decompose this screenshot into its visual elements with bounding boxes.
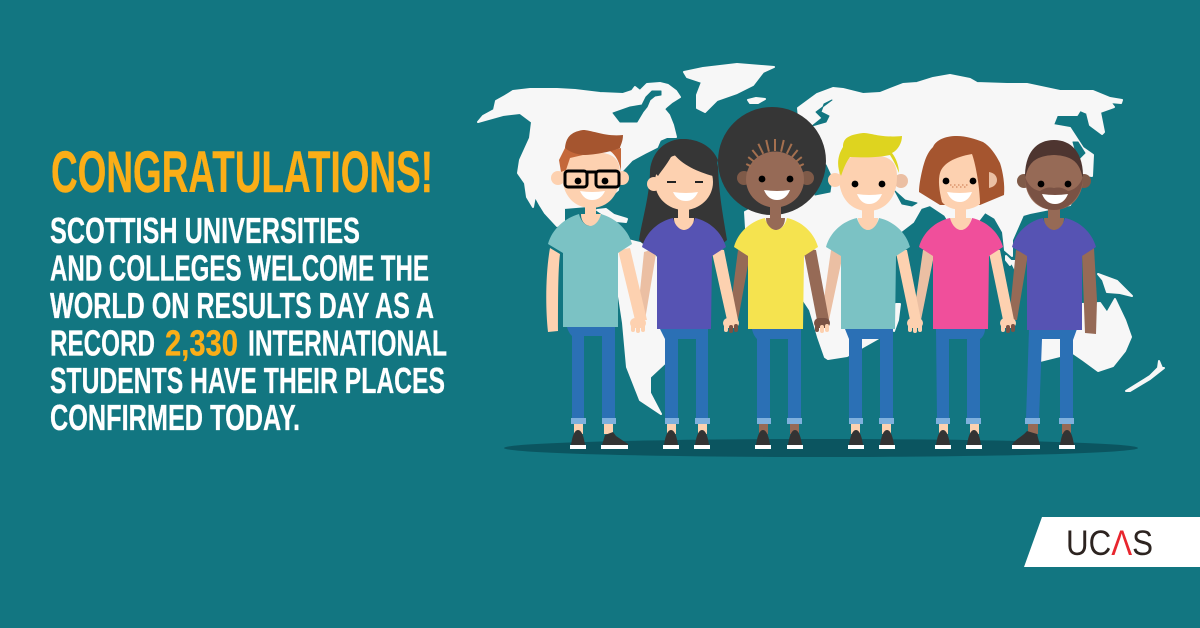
smile bbox=[580, 191, 605, 200]
face bbox=[647, 154, 713, 210]
shirt bbox=[919, 218, 1003, 329]
ground shadow bbox=[504, 439, 1138, 457]
map: scandinavian sea bbox=[812, 100, 832, 126]
text block: announcement: AND COLLEGES WELCOME THE bbox=[50, 248, 429, 288]
ankles and cuffs bbox=[936, 418, 981, 434]
shoes bbox=[848, 430, 895, 449]
person 5: woman with red hair bbox=[913, 136, 1016, 449]
neck bbox=[581, 200, 601, 226]
person 4: blond man bbox=[821, 133, 923, 449]
ankles and cuffs bbox=[665, 418, 710, 434]
hair bbox=[919, 136, 1004, 205]
neck bbox=[1044, 200, 1064, 230]
hair bbox=[559, 130, 623, 172]
face bbox=[1025, 155, 1083, 210]
person 6: man with beard bbox=[1009, 140, 1097, 449]
person 3: woman with afro bbox=[718, 107, 830, 449]
world map bbox=[478, 64, 1164, 414]
map: indonesia bbox=[1011, 261, 1022, 269]
hand: holding person 3 bbox=[723, 318, 739, 333]
map: south america bbox=[616, 240, 668, 414]
shirt bbox=[734, 218, 818, 329]
map: south-east asian islands bbox=[1006, 256, 1012, 265]
text block: announcement: STUDENTS HAVE THEIR PLACES bbox=[50, 360, 445, 401]
fringe bbox=[652, 139, 718, 176]
arms bbox=[637, 248, 738, 320]
trousers bbox=[845, 329, 893, 419]
ankles and cuffs bbox=[849, 418, 894, 434]
afro bbox=[718, 107, 826, 215]
person 2: woman with long black hair bbox=[637, 139, 739, 449]
shoes bbox=[755, 430, 803, 449]
neck bbox=[858, 200, 878, 230]
map: persian gulf bbox=[895, 191, 917, 206]
map: iceland bbox=[748, 98, 765, 103]
face bbox=[828, 155, 908, 211]
text block: announcement: CONFIRMED TODAY. bbox=[50, 397, 300, 438]
ankles and cuffs bbox=[571, 418, 616, 434]
ears bbox=[1017, 174, 1091, 188]
trousers bbox=[660, 329, 708, 419]
long hair bbox=[639, 139, 727, 250]
eyes and smile bbox=[759, 176, 793, 200]
eyes and smile bbox=[1038, 181, 1071, 204]
map: sea of japan bbox=[1073, 142, 1085, 160]
map: north america bbox=[478, 83, 680, 226]
map: greenland bbox=[684, 64, 774, 112]
map: australia bbox=[1040, 299, 1131, 371]
map: caribbean islands bbox=[597, 209, 627, 222]
shirt bbox=[1012, 218, 1096, 330]
map: eurasia and africa bbox=[745, 75, 1122, 359]
hand: holding person 5 bbox=[907, 318, 923, 333]
map: new guinea bbox=[1098, 274, 1132, 296]
hair bbox=[838, 133, 902, 176]
arms bbox=[729, 248, 829, 320]
text block: announcement: WORLD ON RESULTS DAY AS A bbox=[50, 285, 434, 326]
trousers bbox=[1026, 329, 1077, 419]
neck bbox=[674, 200, 694, 230]
shoes bbox=[663, 430, 710, 449]
arms bbox=[821, 248, 921, 320]
hand: holding person 4 bbox=[814, 318, 830, 333]
arms bbox=[913, 248, 1014, 320]
hair rays bbox=[746, 139, 804, 166]
arms bbox=[1009, 248, 1097, 334]
neck bbox=[766, 200, 785, 230]
shoes bbox=[935, 430, 982, 449]
closed eyes and smile bbox=[667, 182, 703, 201]
eyes and smile bbox=[852, 181, 885, 204]
neck bbox=[950, 200, 971, 230]
hand: holding person 2 bbox=[630, 318, 646, 333]
text block: announcement bbox=[50, 210, 447, 438]
shoes bbox=[570, 430, 628, 449]
ankles and cuffs bbox=[757, 418, 802, 434]
face bbox=[551, 152, 629, 208]
map: new zealand bbox=[1126, 361, 1164, 391]
face bbox=[737, 152, 814, 208]
shirt bbox=[642, 218, 726, 329]
beard bbox=[1025, 176, 1083, 210]
ankles and cuffs bbox=[1025, 418, 1074, 434]
shirt bbox=[826, 218, 910, 329]
map: hudson bay bbox=[613, 91, 661, 122]
ear bbox=[989, 172, 997, 188]
text block: announcement: RECORD bbox=[50, 322, 155, 364]
hand: holding person 6 bbox=[1000, 318, 1016, 333]
text block: announcement: SCOTTISH UNIVERSITIES bbox=[50, 210, 360, 251]
text block: announcement: 2,330 bbox=[165, 322, 238, 364]
person 1: man with glasses bbox=[546, 130, 647, 449]
map: mediterranean bbox=[815, 160, 832, 195]
shirt bbox=[548, 214, 632, 327]
logo: UCAS: UCΛS bbox=[1066, 524, 1153, 563]
eyes, freckles and smile bbox=[943, 178, 976, 202]
glasses and eyes bbox=[565, 171, 619, 187]
text block: announcement: INTERNATIONAL bbox=[248, 322, 447, 364]
shoes bbox=[1012, 430, 1075, 449]
trousers bbox=[936, 329, 985, 419]
arms bbox=[546, 248, 647, 332]
logo panel bbox=[1024, 517, 1200, 567]
hair bbox=[1025, 140, 1083, 180]
face bbox=[939, 154, 980, 210]
heading: congratulations: CONGRATULATIONS! bbox=[51, 140, 433, 205]
map: madagascar bbox=[894, 304, 900, 331]
trousers bbox=[567, 327, 615, 419]
trousers bbox=[752, 329, 801, 419]
